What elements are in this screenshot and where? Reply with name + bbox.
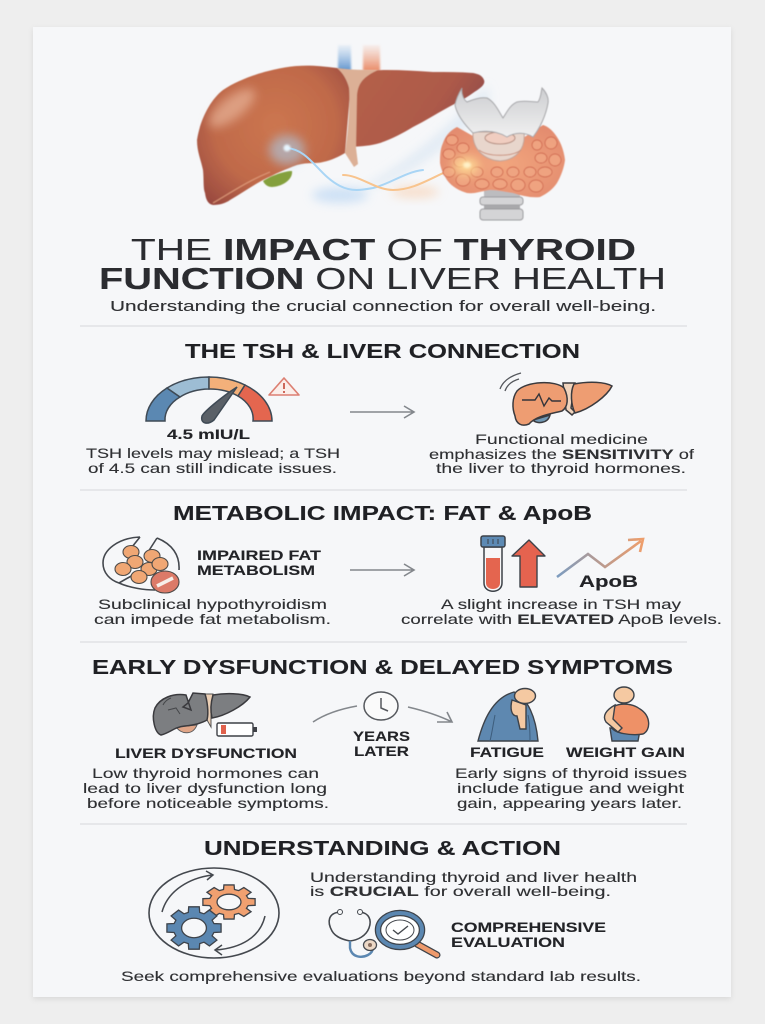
- text: seek evaluations: Seek comprehensive evaluations beyond standard lab results.: [121, 968, 641, 984]
- cartilage: [455, 88, 548, 137]
- text: early signs: gain, appearing years later.: [457, 795, 682, 811]
- gauge value: 4.5 mIU/L: [167, 426, 251, 442]
- icon: fat cells: [103, 537, 179, 593]
- arrow: curve from clock: [408, 707, 452, 722]
- text: TSH may mislead: TSH levels may mislead; a TSH: [86, 445, 340, 461]
- label: comprehensive evaluation: EVALUATION: [451, 934, 565, 950]
- text: subclinical hypothyroidism: [94, 596, 331, 627]
- section: early dysfunction and delayed symptoms: [83, 657, 687, 811]
- section: the TSH and liver connection: [86, 341, 694, 476]
- arrow: [350, 564, 414, 576]
- text: functional medicine: the liver to thyroid hormones.: [436, 460, 686, 476]
- label: impaired fat metabolism: [197, 547, 322, 578]
- title: THE IMPACT OF THYROID: [131, 232, 636, 267]
- icon: magnifier with check: [378, 913, 437, 955]
- signal wave: [269, 135, 467, 203]
- section: metabolic impact: [94, 503, 722, 627]
- label: impaired fat metabolism: IMPAIRED FAT: [197, 547, 322, 563]
- text: elevated ApoB: [401, 596, 722, 627]
- heading: METABOLIC IMPACT: FAT & ApoB: [173, 503, 592, 525]
- text: elevated ApoB: A slight increase in TSH may: [441, 596, 681, 612]
- icon: damaged liver and battery: [153, 693, 257, 736]
- text: low thyroid hormones: Low thyroid hormones can: [92, 765, 319, 781]
- text: TSH may mislead: of 4.5 can still indicate issues.: [88, 460, 337, 476]
- liver: [197, 66, 490, 205]
- icon: gears in cycle: [149, 868, 279, 958]
- text: low thyroid hormones: lead to liver dysfunction long: [83, 780, 327, 796]
- text: functional medicine: [429, 431, 694, 476]
- text: crucial: Understanding thyroid and liver health: [310, 869, 637, 885]
- heading: THE TSH & LIVER CONNECTION: [185, 341, 580, 363]
- text: functional medicine: Functional medicine: [475, 431, 648, 447]
- title: [99, 232, 666, 296]
- text: low thyroid hormones: before noticeable symptoms.: [87, 795, 329, 811]
- text: elevated ApoB: correlate with ELEVATED ApoB levels.: [401, 611, 722, 627]
- blood vessels: [338, 45, 380, 71]
- icon: up arrow: [512, 540, 545, 587]
- text: TSH may mislead: [86, 445, 340, 476]
- text: crucial: [310, 869, 637, 899]
- title: FUNCTION ON LIVER HEALTH: [99, 261, 666, 296]
- windpipe: [473, 132, 524, 161]
- label: years later: YEARS: [353, 728, 410, 744]
- trachea: [480, 190, 523, 220]
- heading: EARLY DYSFUNCTION & DELAYED SYMPTOMS: [92, 657, 673, 679]
- icon: rising trend: [557, 539, 643, 577]
- icon: warning: [269, 378, 299, 395]
- text: early signs: include fatigue and weight: [457, 780, 684, 796]
- thyroid: [440, 88, 565, 220]
- label: years later: LATER: [354, 743, 409, 759]
- label: comprehensive evaluation: COMPREHENSIVE: [451, 919, 606, 935]
- hero illustration: liver and thyroid: [197, 45, 565, 220]
- icon: fatigue figure: [478, 688, 538, 741]
- text: subclinical hypothyroidism: can impede fat metabolism.: [94, 611, 331, 627]
- labels: fatigue and weight gain: [470, 744, 685, 760]
- label: comprehensive evaluation: [451, 919, 606, 950]
- heading: UNDERSTANDING & ACTION: [204, 838, 561, 860]
- labels: fatigue and weight gain: FATIGUE: [470, 744, 544, 760]
- label: ApoB: ApoB: [579, 572, 638, 591]
- text: crucial: is CRUCIAL for overall well-being.: [310, 883, 611, 899]
- icon: test tube: [481, 536, 505, 591]
- label: liver dysfunction: LIVER DYSFUNCTION: [115, 745, 297, 761]
- text: subclinical hypothyroidism: Subclinical hypothyroidism: [98, 596, 327, 612]
- icon: clock: [364, 692, 398, 720]
- subtitle: Understanding the crucial connection for overall well-being.: [110, 298, 656, 315]
- arrow: [350, 406, 414, 418]
- icon: stethoscope: [329, 910, 376, 957]
- text: early signs: [455, 765, 687, 811]
- section: understanding and action: [121, 838, 641, 984]
- label: impaired fat metabolism: METABOLISM: [197, 562, 315, 578]
- text: functional medicine: emphasizes the SENSITIVITY of: [429, 446, 694, 462]
- icon: liver with pulse: [500, 373, 612, 425]
- labels: fatigue and weight gain: WEIGHT GAIN: [566, 744, 685, 760]
- text: low thyroid hormones: [83, 765, 329, 811]
- text: early signs: Early signs of thyroid issues: [455, 765, 687, 781]
- arrow: curve into clock: [313, 706, 357, 722]
- label: years later: [353, 728, 410, 759]
- icon: gauge: [146, 377, 272, 423]
- icon: weight gain figure: [604, 687, 649, 741]
